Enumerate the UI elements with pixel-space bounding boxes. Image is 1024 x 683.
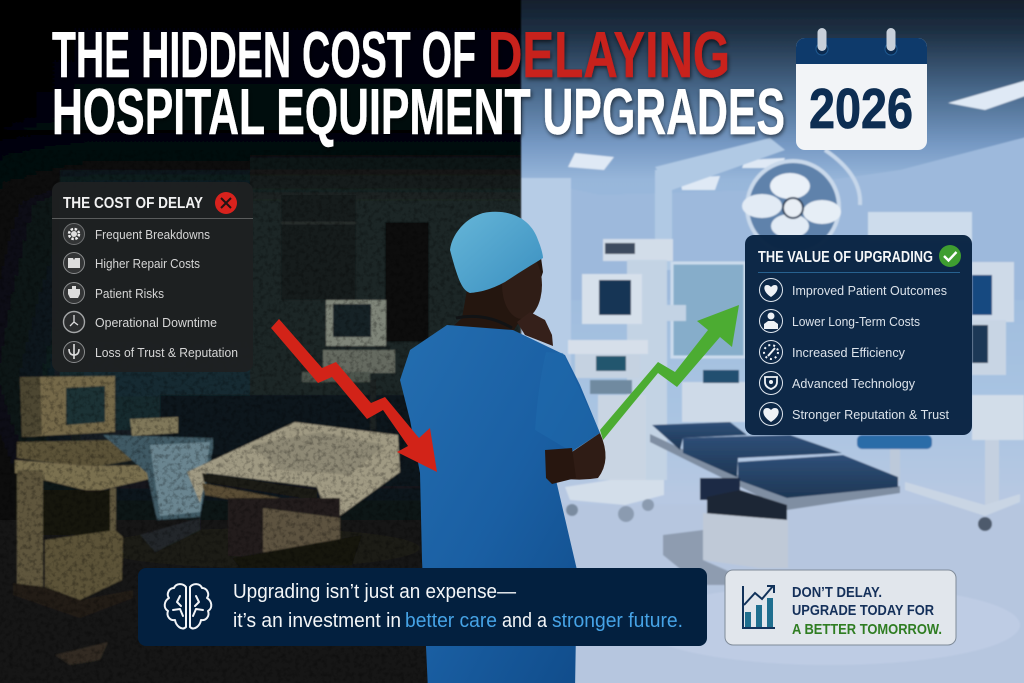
item: lower long-term costs bbox=[760, 310, 920, 332]
hand at chin bbox=[517, 312, 553, 346]
title bbox=[52, 18, 785, 148]
title: THE HIDDEN COST OF bbox=[52, 18, 476, 91]
right monitors bbox=[857, 262, 1024, 531]
background: bright operating room bbox=[521, 0, 1024, 683]
callout: investment message: better care bbox=[405, 610, 497, 632]
item: stronger reputation and trust: Stronger Reputation & Trust bbox=[792, 407, 949, 422]
item: advanced technology: Advanced Technology bbox=[792, 376, 915, 391]
ceiling boom arm bbox=[655, 138, 785, 270]
icon: green check bbox=[939, 245, 961, 267]
title: DELAYING bbox=[488, 18, 730, 91]
old wall monitor bbox=[302, 300, 395, 430]
counter bbox=[682, 382, 746, 422]
callout: investment message: stronger future. bbox=[552, 610, 683, 632]
item: frequent breakdowns: Frequent Breakdowns bbox=[95, 228, 210, 242]
panel: the value of upgrading bbox=[745, 235, 972, 435]
callout: investment message: and a bbox=[502, 610, 548, 632]
blue scrub top bbox=[400, 325, 600, 683]
calendar icon 2026 bbox=[796, 28, 927, 150]
dark floor bbox=[0, 520, 430, 683]
item: frequent breakdowns bbox=[64, 224, 210, 244]
icon: brain bbox=[165, 584, 211, 628]
heading: value of upgrading: THE VALUE OF UPGRADING bbox=[758, 249, 933, 266]
callout: don't delay: UPGRADE TODAY FOR bbox=[792, 602, 934, 619]
item: increased efficiency: Increased Efficiency bbox=[792, 345, 905, 360]
item: lower long-term costs: Lower Long-Term Costs bbox=[792, 314, 920, 329]
ceiling lights bbox=[568, 78, 1024, 190]
panel: the cost of delay bbox=[52, 182, 253, 372]
item: operational downtime bbox=[64, 312, 217, 332]
call to action text: DON’T DELAY. bbox=[792, 584, 882, 601]
green upward arrow bbox=[600, 305, 739, 440]
icon: red x bbox=[215, 192, 237, 214]
callout: investment message bbox=[138, 568, 707, 646]
old bed bbox=[187, 422, 400, 568]
neck and head bbox=[447, 250, 553, 346]
background: dark neglected room bbox=[0, 0, 521, 683]
icon: rising bar chart bbox=[743, 586, 775, 628]
item: improved patient outcomes: Improved Patient Outcomes bbox=[792, 283, 947, 298]
blue scrub cap bbox=[450, 212, 543, 293]
item: loss of trust and reputation: Loss of Trust & Reputation bbox=[95, 346, 238, 360]
item: improved patient outcomes bbox=[760, 278, 947, 302]
stethoscope bbox=[456, 316, 512, 328]
item: stronger reputation and trust bbox=[760, 402, 949, 426]
grime texture on dark room bbox=[0, 150, 521, 683]
red downward arrow bbox=[271, 319, 437, 472]
calendar icon 2026: 2026 bbox=[809, 77, 913, 141]
surgical lamp bbox=[742, 150, 860, 253]
callout text: Upgrading isn’t just an expense— bbox=[233, 581, 516, 603]
old monitor cabinet bbox=[13, 376, 159, 618]
item: increased efficiency bbox=[760, 340, 905, 364]
item: operational downtime: Operational Downtime bbox=[95, 316, 217, 330]
monitor stack left bbox=[565, 239, 686, 522]
item: patient risks bbox=[64, 282, 164, 304]
item: higher repair costs: Higher Repair Costs bbox=[95, 257, 200, 271]
item: higher repair costs bbox=[64, 252, 200, 274]
window bbox=[868, 212, 972, 242]
floor bbox=[521, 505, 1024, 683]
item: loss of trust and reputation bbox=[64, 342, 238, 362]
callout: investment message: it’s an investment in bbox=[233, 610, 401, 632]
surgeon figure bbox=[400, 212, 606, 683]
upper wall band bbox=[521, 135, 1024, 300]
operating table bbox=[650, 422, 900, 585]
item: advanced technology bbox=[760, 372, 915, 394]
callout: don't delay: A BETTER TOMORROW. bbox=[792, 621, 942, 638]
blue stained cloth cart bbox=[103, 417, 213, 552]
callout: don't delay bbox=[725, 570, 956, 645]
heading: cost of delay: THE COST OF DELAY bbox=[63, 195, 204, 212]
crossed arms bbox=[546, 433, 606, 480]
dark door bbox=[281, 195, 429, 342]
item: patient risks: Patient Risks bbox=[95, 287, 164, 301]
